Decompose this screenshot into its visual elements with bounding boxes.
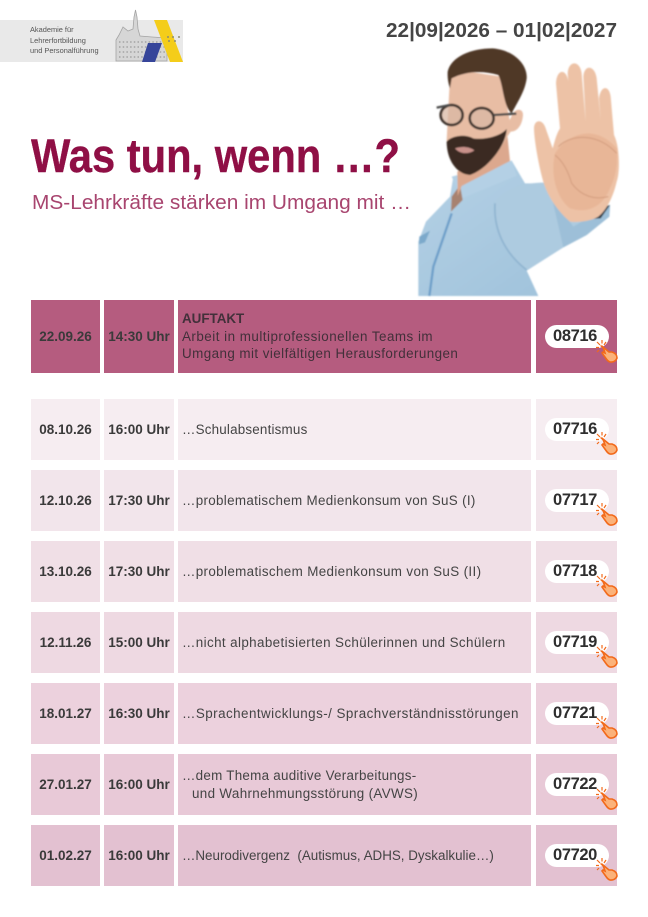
icon: click hand <box>596 716 618 739</box>
icon: click hand <box>596 340 618 363</box>
course number 07719 <box>545 631 609 654</box>
schedule row: 12.10.26 <box>31 470 618 531</box>
course number 07722 <box>545 773 609 796</box>
schedule row: 12.11.26 <box>31 612 618 673</box>
schedule row: 12.11.26: …nicht alphabetisierten Schülerinnen und Schülern <box>182 635 506 650</box>
schedule row: 18.01.27: 16:30 Uhr <box>108 706 170 721</box>
icon: click hand <box>596 574 618 597</box>
schedule row: Auftakt 22.09.26: 14:30 Uhr <box>108 329 170 344</box>
schedule row: 08.10.26: 16:00 Uhr <box>108 422 170 437</box>
logo: Akademie header band <box>0 10 183 62</box>
schedule row: 08.10.26: …Schulabsentismus <box>182 422 307 437</box>
course number 08716 <box>545 325 609 348</box>
icon: click hand <box>596 858 618 881</box>
icon: click hand <box>596 503 618 526</box>
logo text: und Personalführung <box>30 46 99 55</box>
schedule row: 13.10.26: …problematischem Medienkonsum von SuS (II) <box>182 564 481 579</box>
schedule row: 18.01.27: …Sprachentwicklungs-/ Sprachverständnisstörungen <box>182 706 519 721</box>
glasses <box>441 105 494 129</box>
schedule row: Auftakt 22.09.26: Umgang mit vielfältigen Herausforderungen <box>182 346 458 361</box>
schedule row: 01.02.27: 01.02.27 <box>39 848 92 863</box>
schedule row: 27.01.27: 27.01.27 <box>39 777 92 792</box>
schedule row: Auftakt 22.09.26 <box>31 300 618 373</box>
schedule row: 12.10.26: 12.10.26 <box>39 493 92 508</box>
course number 07722: 07722 <box>553 775 597 793</box>
schedule row: 27.01.27: …dem Thema auditive Verarbeitungs- <box>182 768 416 783</box>
hand <box>534 63 619 222</box>
logo text: Akademie für <box>30 25 74 34</box>
schedule row: 27.01.27: 16:00 Uhr <box>108 777 170 792</box>
icon: click hand <box>596 787 618 810</box>
schedule row: 13.10.26: 17:30 Uhr <box>108 564 170 579</box>
course number 07720: 07720 <box>553 846 597 864</box>
course number 07717 <box>545 489 609 512</box>
face <box>447 70 523 173</box>
course number 07719: 07719 <box>553 633 597 651</box>
course number 07720 <box>545 844 609 867</box>
schedule row: 27.01.27 <box>31 754 618 815</box>
photo: man showing stop gesture <box>418 47 620 297</box>
schedule row: 13.10.26 <box>31 541 618 602</box>
logo text <box>30 25 99 55</box>
schedule row: Auftakt 22.09.26: AUFTAKT <box>182 311 244 326</box>
schedule row: Auftakt 22.09.26: 22.09.26 <box>39 329 92 344</box>
schedule row: Auftakt 22.09.26: Arbeit in multiprofessionellen Teams im <box>182 329 433 344</box>
course number 07718 <box>545 560 609 583</box>
schedule row: 12.10.26: …problematischem Medienkonsum von SuS (I) <box>182 493 476 508</box>
schedule row: 01.02.27: 16:00 Uhr <box>108 848 170 863</box>
cuff shadow <box>554 199 610 220</box>
course number 07717: 07717 <box>553 491 597 509</box>
icon: click hand <box>596 645 618 668</box>
icon: click hand <box>596 432 618 455</box>
course number 07718: 07718 <box>553 562 597 580</box>
schedule row: 08.10.26 <box>31 399 618 460</box>
schedule row: 18.01.27: 18.01.27 <box>39 706 92 721</box>
hair <box>448 48 527 113</box>
schedule row: 13.10.26: 13.10.26 <box>39 564 92 579</box>
schedule row: 01.02.27: …Neurodivergenz (Autismus, ADHS, Dyskalkulie…) <box>182 848 494 863</box>
date range: 22|09|2026 – 01|02|2027 <box>386 20 617 42</box>
icon: castle and A mark <box>116 10 183 62</box>
schedule row: 27.01.27: und Wahrnehmungsstörung (AVWS) <box>192 786 418 800</box>
shirt <box>418 161 610 296</box>
course number 07716: 07716 <box>553 420 597 438</box>
neck <box>457 135 510 196</box>
schedule row: 08.10.26: 08.10.26 <box>39 422 92 437</box>
schedule row: 18.01.27 <box>31 683 618 744</box>
logo text: Lehrerfortbildung <box>30 36 86 44</box>
schedule row: 12.10.26: 17:30 Uhr <box>108 493 170 508</box>
schedule row: 12.11.26: 15:00 Uhr <box>108 635 170 650</box>
course number 07716 <box>545 418 609 441</box>
schedule row: 12.11.26: 12.11.26 <box>40 635 91 650</box>
course number 08716: 08716 <box>553 327 597 345</box>
subtitle: MS-Lehrkräfte stärken im Umgang mit … <box>32 192 411 214</box>
course number 07721: 07721 <box>553 704 597 722</box>
course number 07721 <box>545 702 609 725</box>
beard <box>447 129 507 175</box>
schedule row: 01.02.27 <box>31 825 618 886</box>
